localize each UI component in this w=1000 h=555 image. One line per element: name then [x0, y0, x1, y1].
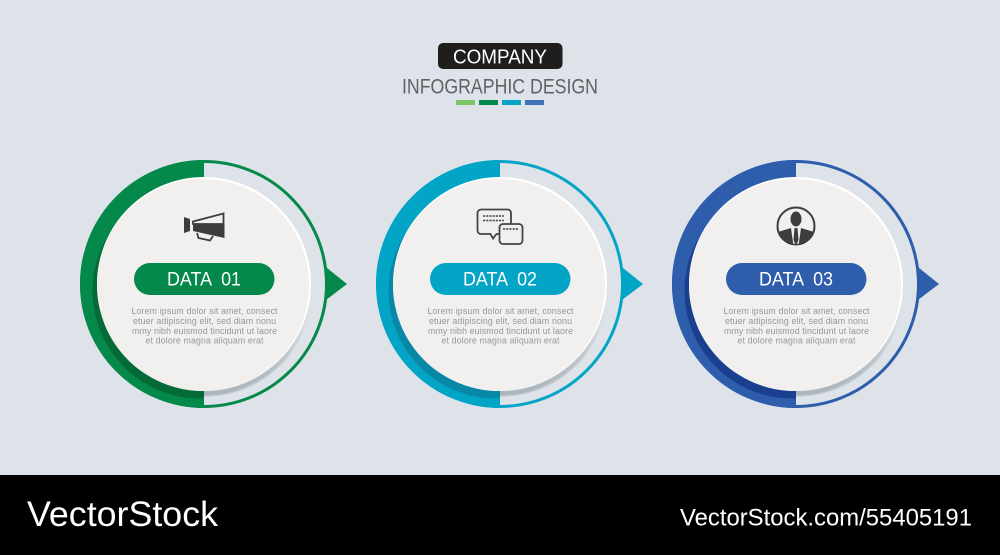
title block — [402, 43, 598, 105]
soft shadow — [796, 326, 896, 396]
icon: businessman — [778, 208, 814, 246]
subtitle: INFOGRAPHIC DESIGN — [402, 76, 598, 98]
body text: Lorem ipsum dolor sit amet, consect — [428, 306, 574, 316]
arrow — [618, 264, 643, 303]
pill label: DATA 01 — [167, 270, 241, 290]
panel: data 01 — [80, 160, 347, 408]
soft shadow — [204, 326, 304, 396]
inner disc — [97, 177, 311, 391]
outer ring — [378, 162, 622, 406]
icon: chat bubbles — [478, 210, 522, 244]
company label: COMPANY — [453, 46, 547, 68]
body text — [724, 306, 870, 346]
soft shadow — [500, 326, 600, 396]
thick left half — [80, 160, 204, 408]
label pill — [430, 263, 570, 295]
panel: data 03 — [672, 160, 939, 408]
thick left half — [376, 160, 500, 408]
colour key — [456, 100, 544, 105]
pill label: DATA 02 — [463, 270, 537, 290]
company badge — [438, 43, 562, 69]
label pill — [134, 263, 274, 295]
label pill — [726, 263, 866, 295]
arrow — [322, 264, 347, 303]
dark crescent — [388, 230, 500, 398]
inner disc — [689, 177, 903, 391]
outer ring — [674, 162, 918, 406]
body text: etuer adipiscing elit, sed diam nonu — [725, 316, 868, 326]
body text: mmy nibh euismod tincidunt ut laore — [132, 326, 277, 336]
body text: et dolore magna aliquam erat — [738, 336, 856, 346]
arrow — [914, 264, 939, 303]
dark crescent — [92, 230, 204, 398]
body text: etuer adipiscing elit, sed diam nonu — [429, 316, 572, 326]
body text: et dolore magna aliquam erat — [146, 336, 264, 346]
dark crescent — [684, 230, 796, 398]
inner disc — [393, 177, 607, 391]
body text: etuer adipiscing elit, sed diam nonu — [133, 316, 276, 326]
body text: Lorem ipsum dolor sit amet, consect — [132, 306, 278, 316]
body text: mmy nibh euismod tincidunt ut laore — [724, 326, 869, 336]
body text: et dolore magna aliquam erat — [442, 336, 560, 346]
body text — [428, 306, 574, 346]
body text: mmy nibh euismod tincidunt ut laore — [428, 326, 573, 336]
outer ring — [82, 162, 326, 406]
footer url: VectorStock.com/55405191 — [680, 504, 972, 532]
footer bar — [0, 475, 1000, 555]
pill label: DATA 03 — [759, 270, 833, 290]
footer brand: VectorStock — [27, 495, 219, 534]
thick left half — [672, 160, 796, 408]
body text: Lorem ipsum dolor sit amet, consect — [724, 306, 870, 316]
panel: data 02 — [376, 160, 643, 408]
icon: megaphone — [184, 214, 224, 240]
body text — [132, 306, 278, 346]
